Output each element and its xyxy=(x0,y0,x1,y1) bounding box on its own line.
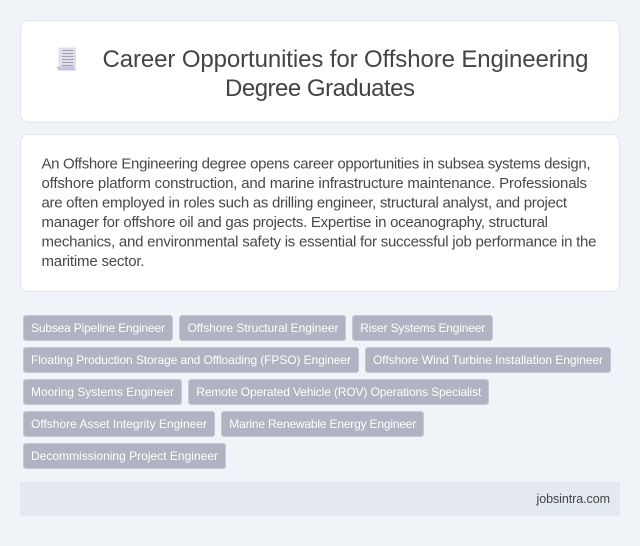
tag list: job titles xyxy=(24,316,610,468)
tag: Marine Renewable Energy Engineer: Marine Renewable Energy Engineer xyxy=(229,417,416,431)
tag: Offshore Wind Turbine Installation Engineer xyxy=(366,348,610,372)
heading xyxy=(102,46,588,102)
tag: ROV Operations Specialist xyxy=(188,380,488,404)
text block: description: maritime sector. xyxy=(42,253,144,270)
tag: Riser Systems Engineer: Riser Systems Engineer xyxy=(360,321,485,335)
tag: Mooring Systems Engineer: Mooring Systems Engineer xyxy=(31,385,174,399)
tag: FPSO Engineer: Floating Production Storage and Offloading (FPSO) Engineer xyxy=(31,353,351,367)
panel: description xyxy=(20,134,620,292)
tag: Offshore Asset Integrity Engineer: Offshore Asset Integrity Engineer xyxy=(31,417,207,431)
tag: Riser Systems Engineer xyxy=(352,316,492,340)
footer: jobsintra.com xyxy=(536,492,610,506)
tag: Offshore Asset Integrity Engineer xyxy=(24,412,214,436)
tag: Subsea Pipeline Engineer: Subsea Pipeline Engineer xyxy=(31,321,165,335)
tag: Offshore Structural Engineer: Offshore Structural Engineer xyxy=(188,321,338,335)
text block: description: offshore platform construction, and marine infrastructure maintenance. Professionals xyxy=(42,175,587,192)
heading: Career Opportunities for Offshore Engineering xyxy=(102,46,588,73)
tag: Decommissioning Project Engineer: Decommissioning Project Engineer xyxy=(31,449,218,463)
tag: Marine Renewable Energy Engineer xyxy=(222,412,424,436)
text block: description: mechanics, and environmental safety is essential for successful job performance in the xyxy=(42,233,596,250)
text block: description: An Offshore Engineering degree opens career opportunities in subsea systems design, xyxy=(42,155,590,172)
tag: ROV Operations Specialist: Remote Operated Vehicle (ROV) Operations Specialist xyxy=(196,385,482,399)
text block: description xyxy=(42,155,596,270)
footer xyxy=(20,482,620,516)
tag: Offshore Wind Turbine Installation Engineer: Offshore Wind Turbine Installation Engineer xyxy=(373,353,603,367)
tag: Decommissioning Project Engineer xyxy=(24,444,226,468)
tag: Mooring Systems Engineer xyxy=(24,380,182,404)
text block: description: manager for offshore oil and gas projects. Expertise in oceanography, structural xyxy=(42,214,548,231)
icon: document scroll xyxy=(57,48,76,70)
panel: title header xyxy=(20,20,620,122)
text block: description: are often employed in roles such as drilling engineer, structural analyst, and project xyxy=(42,194,568,211)
heading: Degree Graduates xyxy=(225,75,415,102)
tag: Offshore Structural Engineer xyxy=(180,316,346,340)
tag: FPSO Engineer xyxy=(24,348,358,372)
tag: Subsea Pipeline Engineer xyxy=(24,316,172,340)
